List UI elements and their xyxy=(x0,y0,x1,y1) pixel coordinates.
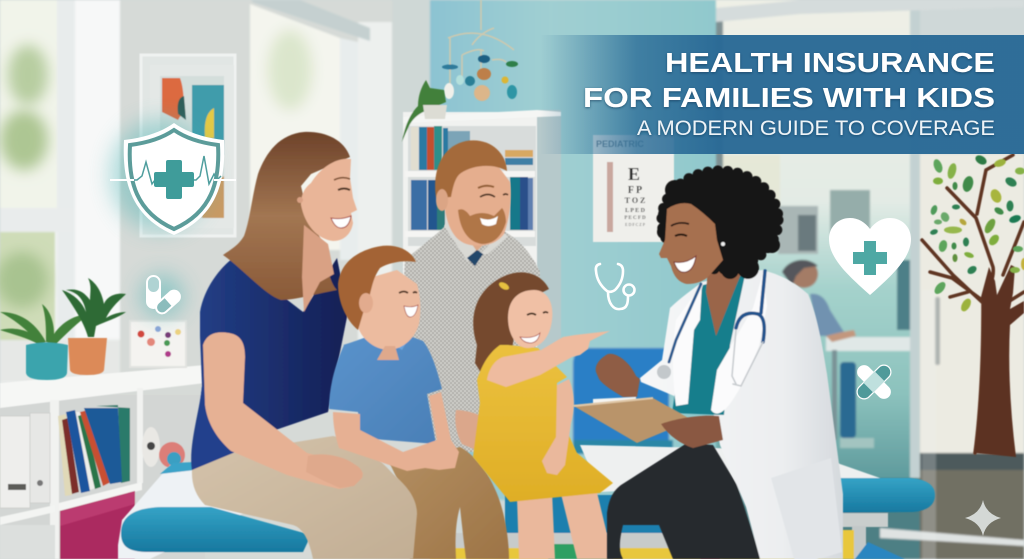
wall xyxy=(0,0,440,559)
subtitle: A MODERN GUIDE TO COVERAGE xyxy=(637,117,995,140)
icon: heart with cross xyxy=(829,218,911,295)
headline line 1: HEALTH INSURANCE xyxy=(665,47,995,78)
girl's dress xyxy=(473,345,613,502)
stethoscope on doctor xyxy=(669,271,765,386)
door handle xyxy=(935,297,940,365)
shelf plant xyxy=(402,80,447,142)
lapels xyxy=(673,272,767,414)
doctor's face xyxy=(659,203,723,284)
eye chart xyxy=(593,135,674,242)
centre window xyxy=(250,0,392,345)
clipboard xyxy=(572,397,692,443)
girl's lower arm and hand xyxy=(542,379,574,475)
framed art xyxy=(141,55,235,236)
toys xyxy=(142,427,160,467)
mother's hand xyxy=(306,454,363,488)
blue bench back xyxy=(573,348,669,448)
eye chart: E xyxy=(628,164,640,184)
eye chart: P E C F D xyxy=(624,216,646,221)
girl's head xyxy=(508,290,552,348)
doctor's lower hand xyxy=(661,416,723,448)
nurse in background xyxy=(782,260,856,342)
left low shelf with books xyxy=(0,365,205,559)
doctor's raised hand xyxy=(596,354,640,397)
right wall with tree xyxy=(920,154,1024,454)
person: mother xyxy=(191,132,417,559)
girl's pointing arm xyxy=(487,331,610,387)
girl's hair xyxy=(473,272,549,373)
bookshelf xyxy=(402,80,561,350)
doctor's trousers xyxy=(607,443,761,559)
eye chart: L P E D xyxy=(625,208,646,214)
eye chart: E D F C Z P xyxy=(625,222,646,227)
mother's shirt xyxy=(191,258,348,470)
kids drawing xyxy=(130,321,186,367)
hanging mobile xyxy=(442,0,518,101)
person: boy xyxy=(329,246,459,471)
lab coat xyxy=(640,270,843,559)
icon: pills xyxy=(140,274,184,318)
boy's trousers xyxy=(390,447,509,559)
mother's neck and face xyxy=(302,225,334,312)
mother's arm xyxy=(203,332,363,489)
boy's head xyxy=(356,270,420,350)
icon: bandage xyxy=(854,362,894,402)
father's hand xyxy=(455,410,492,450)
eye chart: F P xyxy=(628,185,642,196)
neck xyxy=(706,262,746,336)
headline line 2: FOR FAMILIES WITH KIDS xyxy=(583,82,995,113)
teal shirt xyxy=(672,275,745,415)
curly hair xyxy=(657,170,780,279)
person: girl xyxy=(473,272,613,559)
glass partition xyxy=(716,0,1024,490)
pocket xyxy=(771,458,842,559)
boy's arms and hands xyxy=(333,392,459,471)
teal wall xyxy=(430,0,730,500)
polo shirt xyxy=(329,335,442,444)
title banner xyxy=(540,35,1024,154)
icon: shield with cross xyxy=(110,119,236,235)
person: father xyxy=(402,140,540,452)
mother's hair xyxy=(223,132,350,300)
icon: stethoscope xyxy=(596,264,634,309)
wall tree mural xyxy=(922,154,1024,457)
left window xyxy=(0,0,120,383)
plants xyxy=(0,278,126,380)
eye chart: PEDIATRIC xyxy=(596,139,644,149)
mother's trousers xyxy=(192,436,417,559)
person: doctor xyxy=(572,170,843,559)
girl's legs xyxy=(517,484,613,559)
icon: sparkle xyxy=(965,500,1001,536)
exam table xyxy=(118,445,935,559)
eye chart: T O Z xyxy=(625,196,645,205)
